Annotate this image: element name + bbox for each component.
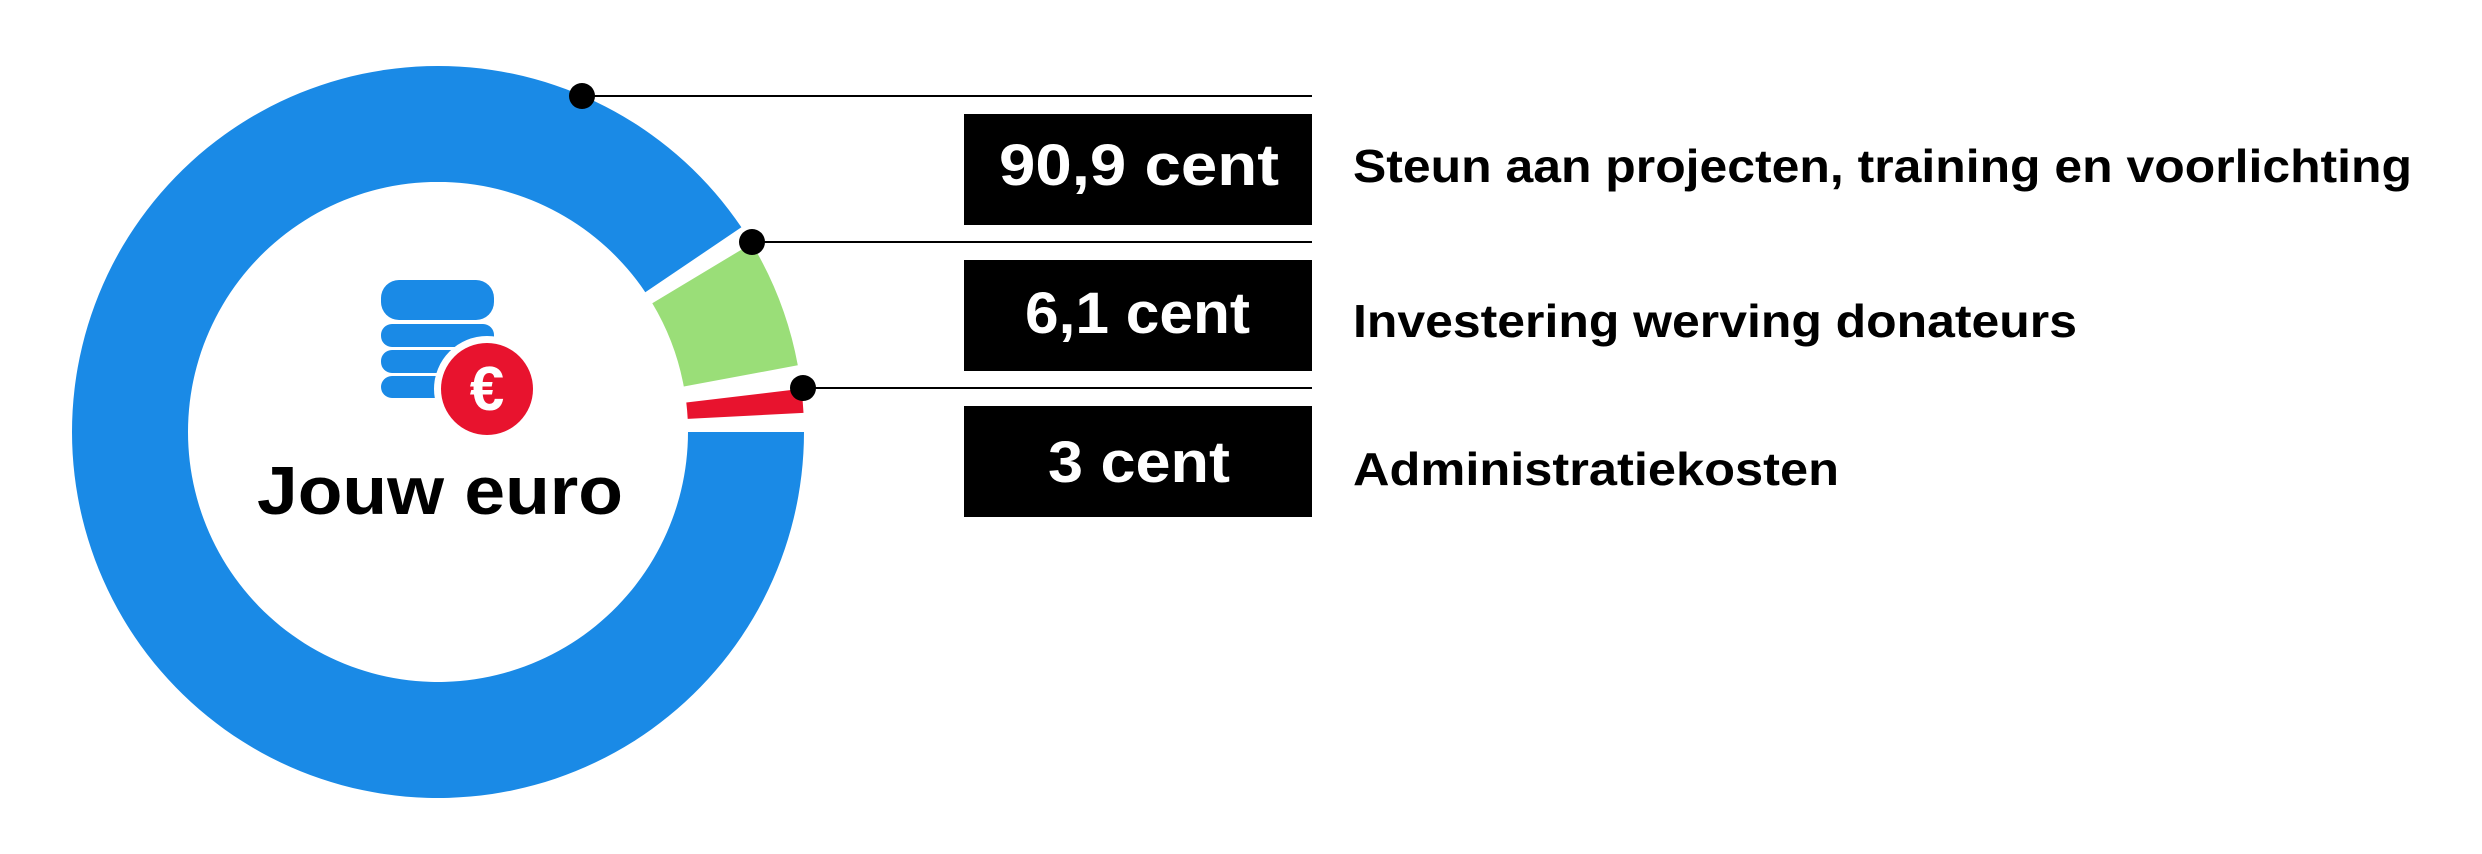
label 1: Steun aan projecten, training en voorlichting [1353,140,2412,192]
leader line 3 [790,375,1312,401]
value box 1 [964,114,1312,225]
icon: coins with euro [381,280,540,442]
segment: werving (green) [652,244,798,386]
value box 1: 90,9 cent [999,133,1279,198]
segment: administratie (red) [686,389,804,419]
value box 2 [964,260,1312,371]
value box 2: 6,1 cent [1025,281,1250,346]
value box 3: 3 cent [1048,430,1230,495]
segment: projects (blue) [72,66,804,798]
value box 3 [964,406,1312,517]
center title: Jouw euro [257,453,623,529]
label 3: Administratiekosten [1353,443,1839,495]
icon: coins with euro: € [470,355,504,424]
leader line 2 [739,229,1312,255]
label 2: Investering werving donateurs [1353,295,2077,347]
donut chart [72,66,804,798]
leader line 1 [569,83,1312,109]
